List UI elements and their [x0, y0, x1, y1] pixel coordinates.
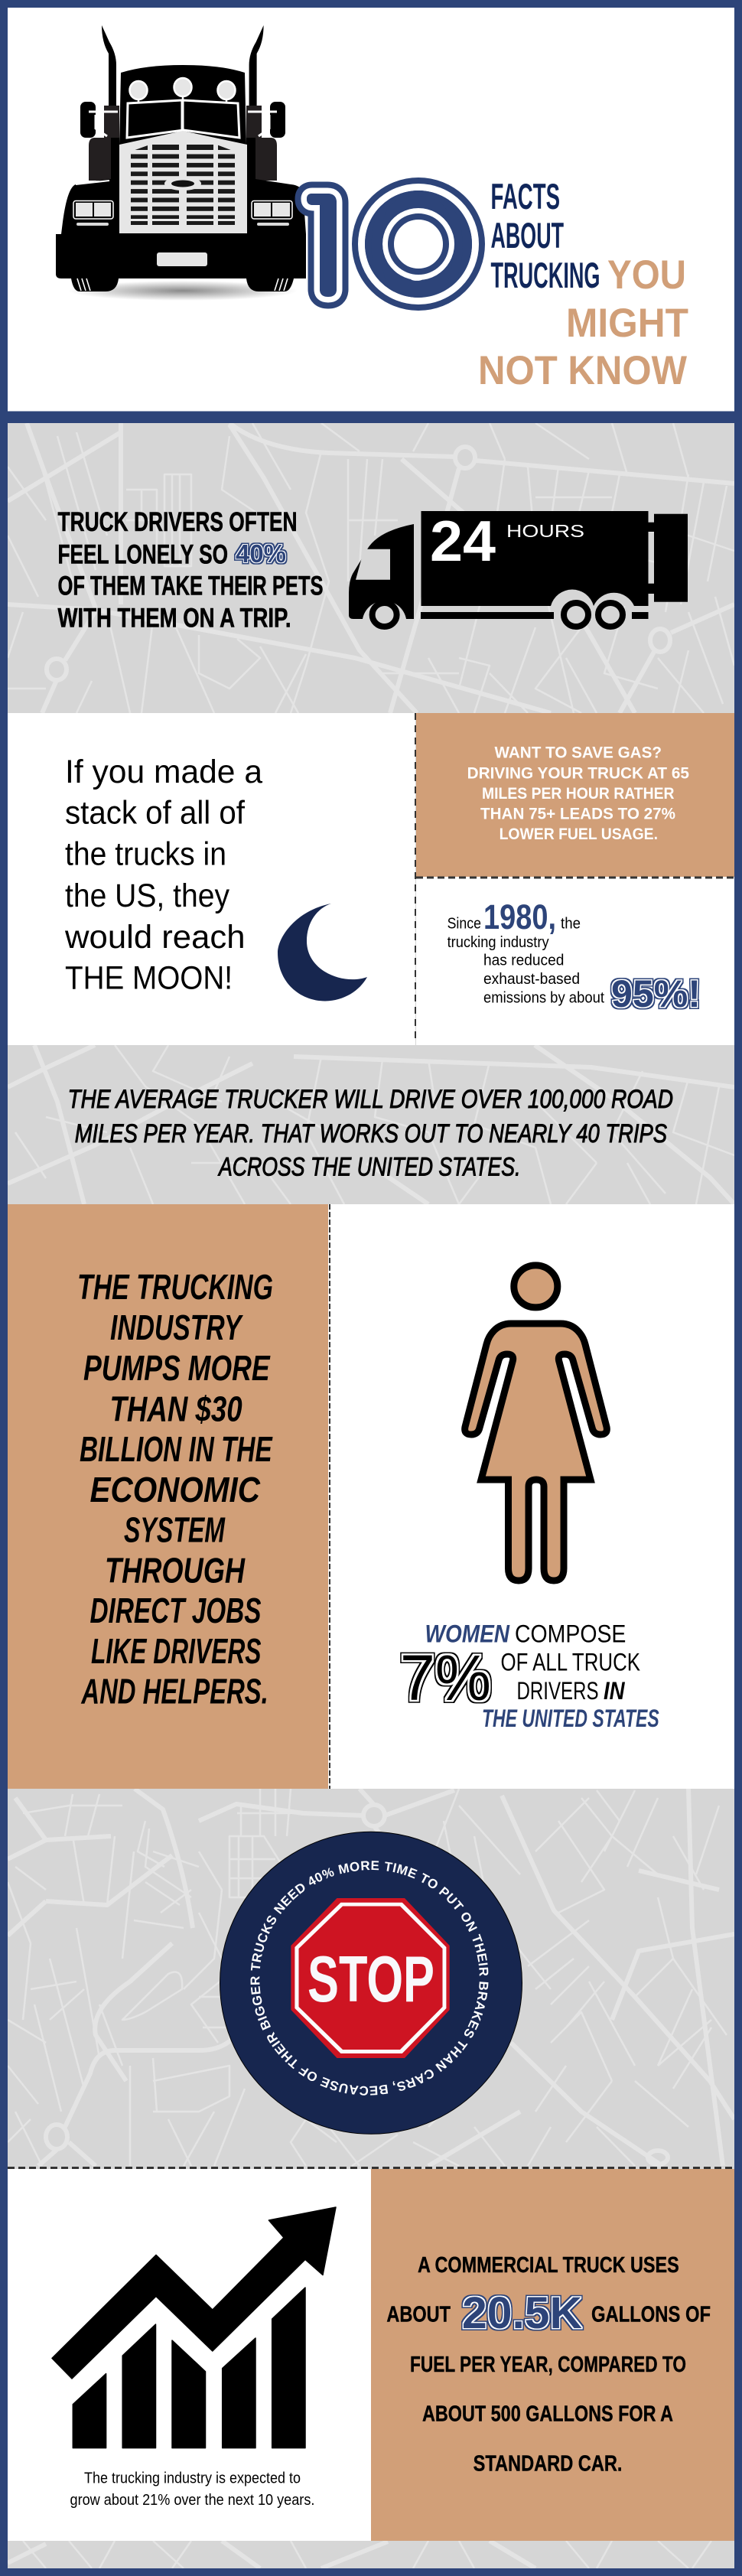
- text: save gas: MILES PER HOUR RATHER: [482, 785, 675, 803]
- title: you might not know: YOU: [607, 252, 686, 298]
- panel: industry growth: [8, 2169, 371, 2541]
- text: growth caption: grow about 21% over the next 10 years.: [70, 2492, 314, 2509]
- title: facts about trucking: ABOUT: [491, 215, 564, 256]
- text: women compose 7%: DRIVERS: [517, 1677, 598, 1705]
- text: thirty billion: THAN $30: [110, 1389, 242, 1429]
- text: stack of trucks: If you made a: [65, 754, 262, 790]
- panel: fuel use: [371, 2169, 734, 2541]
- text: gallons per year: 20.5K: [462, 2288, 582, 2338]
- icon: delivery truck: [349, 509, 688, 627]
- text: emissions fact: Since: [447, 915, 481, 932]
- text: save gas: WANT TO SAVE GAS?: [494, 744, 662, 762]
- icon: woman figure: [465, 1265, 607, 1581]
- text: stack of trucks: the trucks in: [65, 835, 226, 872]
- map background: top section: [8, 423, 734, 713]
- text: stack of trucks: would reach: [64, 919, 245, 956]
- curved text: stopping time: [259, 1870, 480, 2086]
- text: truck drivers and pets: OF THEM TAKE THEIR PETS: [58, 571, 323, 601]
- numeral 10: 1: [255, 151, 389, 343]
- label: 24 hours: 24: [430, 509, 496, 573]
- text: thirty billion: BILLION IN THE: [80, 1429, 273, 1469]
- text: stack of trucks: stack of all of: [65, 795, 246, 832]
- text: save gas: DRIVING YOUR TRUCK AT 65: [467, 765, 689, 783]
- text: emissions fact: exhaust-based: [483, 971, 580, 988]
- text: emissions fact: [447, 897, 701, 1015]
- title: facts about trucking: TRUCKING: [491, 255, 600, 295]
- title: you might not know: NOT KNOW: [478, 348, 687, 393]
- title: you might not know: MIGHT: [566, 301, 688, 346]
- text: save gas: THAN 75+ LEADS TO 27%: [480, 806, 675, 823]
- text: truck drivers and pets: [58, 507, 323, 633]
- text: save gas: LOWER FUEL USAGE.: [500, 826, 658, 843]
- label: stop: STOP: [308, 1943, 434, 2016]
- text: truck drivers and pets: WITH THEM ON A TRIP.: [58, 603, 291, 633]
- text: truck drivers and pets: TRUCK DRIVERS OFTEN: [58, 507, 297, 537]
- text: average trucker: [67, 1085, 673, 1182]
- panel: women drivers: [328, 1204, 734, 1789]
- label: 24 hours: [430, 509, 584, 573]
- text: gallons per year: [386, 2253, 711, 2476]
- text: stack of trucks: [64, 754, 262, 996]
- text: thirty billion: SYSTEM: [124, 1510, 226, 1550]
- map background: stop section: [8, 1789, 734, 2166]
- icon: stop sign: [291, 1898, 450, 2058]
- text: gallons per year: GALLONS OF: [591, 2303, 711, 2327]
- text: thirty billion: THROUGH: [105, 1551, 246, 1591]
- title: facts about trucking: FACTS: [491, 176, 560, 217]
- panel: header: [8, 8, 734, 412]
- numeral 10: 0: [350, 151, 484, 343]
- text: women compose 7%: WOMEN: [425, 1620, 510, 1648]
- text: thirty billion: INDUSTRY: [110, 1308, 244, 1347]
- text: growth caption: The trucking industry is expected to: [84, 2470, 301, 2487]
- text: save gas: [467, 744, 689, 843]
- text: average trucker: ACROSS THE UNITED STATES.: [217, 1153, 520, 1182]
- title: facts about trucking: [491, 176, 600, 295]
- text: thirty billion: THE TRUCKING: [77, 1267, 273, 1307]
- text: women compose 7%: THE UNITED STATES: [482, 1705, 659, 1732]
- text: gallons per year: ABOUT: [386, 2303, 451, 2327]
- label: 24 hours: HOURS: [506, 521, 584, 541]
- text: emissions fact: 95%!: [611, 972, 701, 1015]
- numeral 10: [295, 177, 485, 311]
- map background: middle section: [8, 1045, 734, 1204]
- text: emissions fact: 1980,: [483, 897, 556, 936]
- text: emissions fact: the: [561, 915, 581, 932]
- icon: semi truck front: [56, 25, 306, 301]
- text: growth caption: [70, 2470, 314, 2509]
- icon: crescent moon: [278, 904, 367, 1001]
- text: gallons per year: ABOUT 500 GALLONS FOR A: [422, 2402, 673, 2427]
- text: thirty billion: LIKE DRIVERS: [91, 1631, 262, 1671]
- text: stack of trucks: THE MOON!: [65, 959, 233, 996]
- text: truck drivers and pets: 40%: [236, 539, 286, 568]
- text: thirty billion: DIRECT JOBS: [90, 1591, 262, 1630]
- panel: moon fact: [8, 713, 415, 1045]
- text: emissions fact: has reduced: [483, 953, 564, 969]
- stop badge: [220, 1832, 522, 2135]
- panel: economic system: [8, 1204, 328, 1789]
- text: gallons per year: STANDARD CAR.: [474, 2451, 623, 2476]
- text: women compose 7%: [400, 1620, 659, 1732]
- text: thirty billion: PUMPS MORE: [83, 1348, 271, 1388]
- icon: growth chart: [52, 2207, 336, 2448]
- text: truck drivers and pets: FEEL LONELY SO: [58, 540, 228, 570]
- text: stack of trucks: the US, they: [65, 878, 229, 914]
- text: women compose 7%: IN: [604, 1677, 625, 1705]
- map background: lower strip: [8, 2541, 711, 2568]
- panel: save gas: [416, 713, 734, 877]
- text: women compose 7%: COMPOSE: [515, 1620, 626, 1648]
- stop badge: BECAUSE OF THEIR BIGGER TRUCKS NEED 40% MORE TIME TO PUT ON THEIR BRAKES THAN CARS,: [251, 1861, 488, 2096]
- panel: emissions: [416, 877, 734, 1045]
- text: women compose 7%: OF ALL TRUCK: [500, 1648, 640, 1676]
- text: emissions fact: emissions by about: [483, 990, 604, 1007]
- text: thirty billion: AND HELPERS.: [81, 1671, 268, 1711]
- text: thirty billion: ECONOMIC: [90, 1470, 261, 1509]
- text: women compose 7%: 7%: [400, 1642, 491, 1714]
- text: emissions fact: trucking industry: [447, 934, 549, 951]
- text: gallons per year: A COMMERCIAL TRUCK USES: [418, 2253, 679, 2278]
- title: you might not know: [478, 252, 688, 393]
- text: thirty billion: [77, 1267, 273, 1711]
